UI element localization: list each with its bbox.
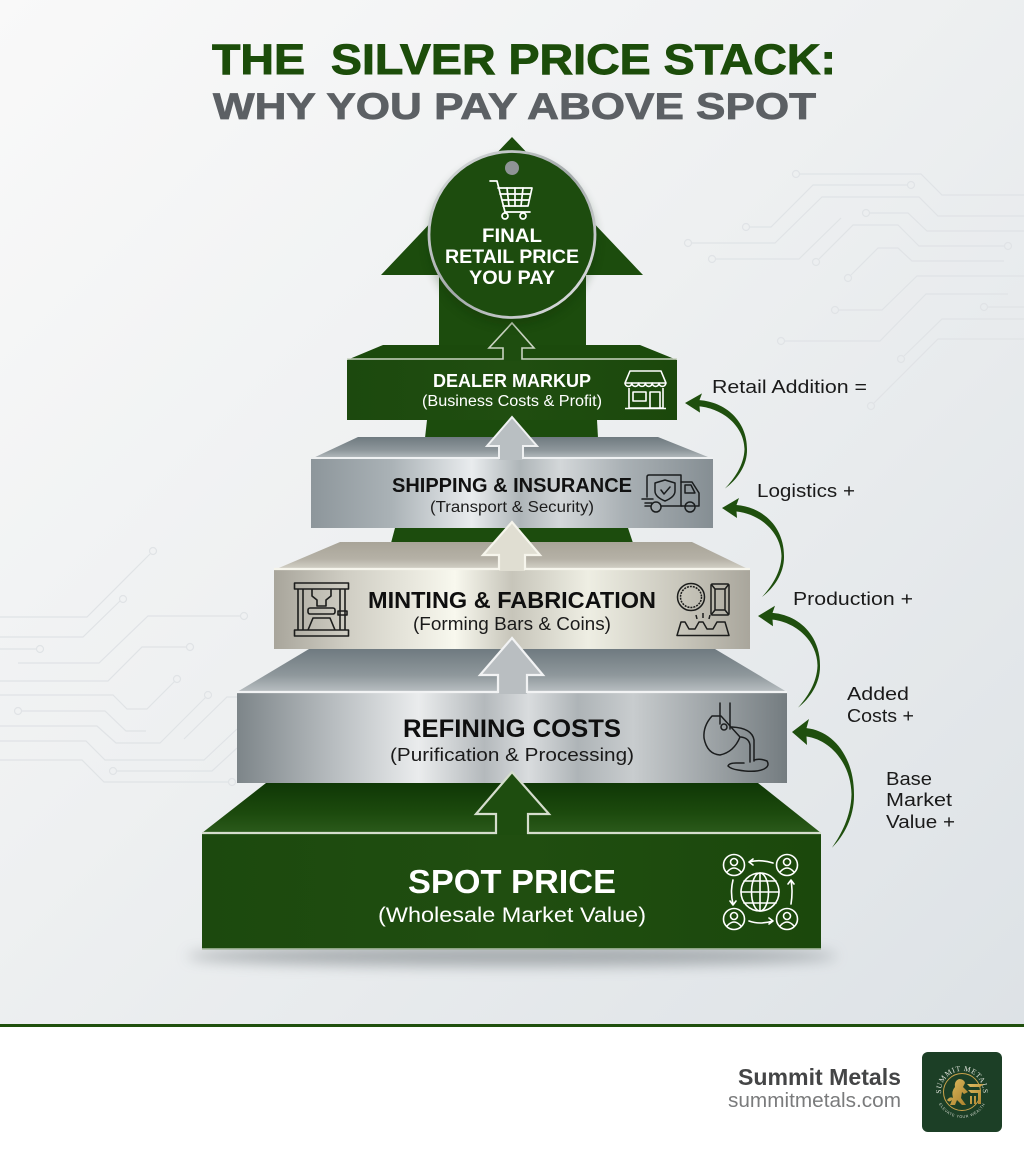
curved arrow: added to production	[758, 606, 820, 708]
circuit pattern right	[684, 170, 1024, 410]
label: base market value: Market	[886, 790, 952, 810]
logo: SUMMIT METALS	[936, 1066, 988, 1094]
dealer markup label	[422, 371, 602, 410]
footer brand text	[728, 1064, 901, 1112]
icon: globe with traders	[724, 854, 798, 930]
curved arrow: logistics to retail	[685, 393, 747, 488]
tier: minting block	[274, 542, 750, 649]
drop shadow under base	[187, 946, 837, 966]
spot price label: SPOT PRICE	[408, 863, 616, 900]
footer band	[0, 1024, 1024, 1154]
icon: shopping cart	[490, 181, 532, 219]
tier: refining block	[237, 649, 787, 783]
shipping label	[392, 475, 632, 516]
big green arrow spine	[381, 137, 643, 543]
label: base market value: Value +	[886, 812, 955, 832]
circuit pattern left	[0, 548, 248, 786]
label: production: Production +	[793, 589, 913, 609]
tier: dealer block	[347, 345, 677, 420]
curved arrow: base to added	[792, 719, 854, 848]
tier: shipping block	[311, 437, 713, 528]
dealer markup label: DEALER MARKUP	[433, 371, 591, 391]
icon: delivery truck with shield	[642, 475, 699, 512]
footer brand text: summitmetals.com	[728, 1090, 901, 1112]
final price circle: FINAL	[482, 225, 542, 247]
refining label: REFINING COSTS	[403, 715, 621, 743]
arrow: spot up to refining	[202, 772, 821, 835]
shipping label: SHIPPING & INSURANCE	[392, 475, 632, 497]
icon: minting press	[294, 583, 348, 636]
dealer markup label: (Business Costs & Profit)	[422, 393, 602, 410]
title	[212, 36, 836, 127]
final price circle: RETAIL PRICE	[445, 246, 579, 268]
icon: ladle pouring metal	[704, 703, 768, 771]
title: WHY YOU PAY ABOVE SPOT	[213, 86, 816, 127]
tier: spot price block	[202, 783, 821, 950]
title: THE SILVER PRICE STACK:	[212, 36, 836, 84]
label: base market value	[886, 769, 955, 832]
minting label	[368, 587, 656, 634]
arrow: refining up to minting	[237, 638, 787, 694]
final price circle	[428, 152, 596, 325]
refining label	[390, 715, 634, 765]
shipping label: (Transport & Security)	[430, 499, 594, 516]
curved arrow: production to logistics	[722, 498, 784, 597]
arrow: shipping up to dealer	[311, 417, 713, 460]
label: retail addition: Retail Addition =	[712, 377, 867, 397]
refining label: (Purification & Processing)	[390, 745, 634, 765]
label: added costs: Added	[847, 684, 909, 704]
icon: storefront	[625, 371, 666, 408]
spot price label: (Wholesale Market Value)	[378, 903, 646, 927]
arrow: dealer up to final price	[347, 323, 677, 361]
label: logistics: Logistics +	[757, 481, 855, 501]
minting label: MINTING & FABRICATION	[368, 587, 656, 613]
logo	[922, 1052, 1002, 1132]
label: added costs: Costs +	[847, 706, 914, 726]
footer brand text: Summit Metals	[738, 1064, 901, 1090]
minting label: (Forming Bars & Coins)	[413, 614, 611, 634]
label: base market value: Base	[886, 769, 932, 789]
arrow: minting up to shipping	[274, 522, 750, 571]
final price circle: YOU PAY	[469, 267, 555, 289]
label: added costs	[847, 684, 914, 726]
icon: coin, bar and mould	[677, 584, 729, 636]
spot price label	[378, 863, 646, 927]
logo: ELEVATE YOUR WEALTH	[939, 1102, 985, 1118]
